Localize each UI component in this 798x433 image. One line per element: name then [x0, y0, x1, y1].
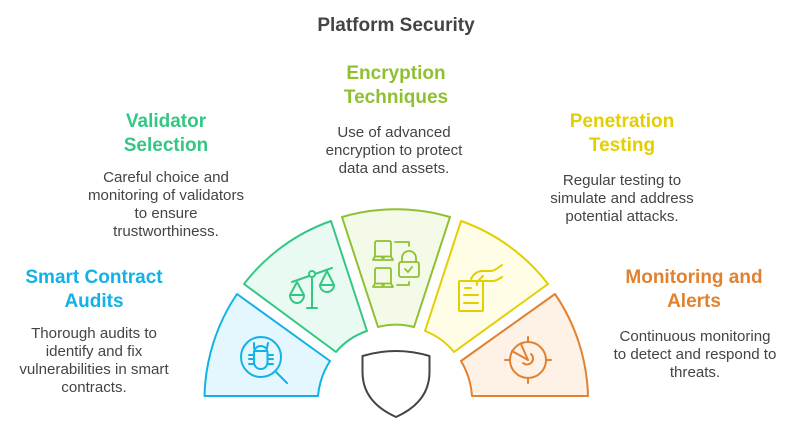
text: Validator Selection — [88, 169, 244, 240]
heading: Encryption Techniques: Techniques — [344, 87, 448, 108]
text: Penetration Testing — [550, 172, 694, 225]
heading: Penetration Testing: Penetration — [570, 111, 674, 132]
icon: bug under magnifier — [241, 337, 287, 383]
heading: Encryption Techniques — [344, 63, 448, 108]
segment: lime — [342, 209, 450, 327]
heading: Validator Selection: Validator — [126, 111, 206, 132]
text: Encryption Techniques: Use of advanced — [337, 124, 451, 141]
text: Validator Selection: to ensure — [135, 205, 197, 222]
text: Smart Contract Audits: contracts. — [61, 379, 127, 396]
text: Validator Selection: Careful choice and — [103, 169, 229, 186]
icon: hand holding document — [459, 265, 502, 311]
heading: Encryption Techniques: Encryption — [346, 63, 446, 84]
text: Encryption Techniques: encryption to protect — [326, 142, 462, 159]
icon: balance scales — [290, 268, 334, 308]
icon: radar gauge — [505, 337, 551, 383]
text: Monitoring and Alerts: Continuous monitoring — [619, 328, 771, 345]
heading: Monitoring and Alerts: Monitoring and — [625, 267, 763, 288]
segment: orange — [461, 294, 588, 396]
title: Platform Security — [317, 15, 475, 36]
text: Penetration Testing: simulate and address — [550, 190, 694, 207]
text: Validator Selection: trustworthiness. — [113, 223, 219, 240]
heading: Penetration Testing: Testing — [589, 135, 655, 156]
heading: Smart Contract Audits — [25, 267, 163, 312]
text: Monitoring and Alerts: threats. — [670, 364, 720, 381]
segment: yellow — [425, 221, 548, 352]
heading: Penetration Testing — [570, 111, 674, 156]
text: Penetration Testing: potential attacks. — [565, 208, 679, 225]
text: Smart Contract Audits — [19, 325, 169, 396]
segment: blue — [204, 294, 330, 396]
heading: Monitoring and Alerts: Alerts — [667, 291, 721, 312]
icon: laptops and padlock — [373, 241, 419, 287]
heading: Monitoring and Alerts — [625, 267, 763, 312]
heading: Validator Selection — [124, 111, 208, 156]
text: Smart Contract Audits: Thorough audits to — [31, 325, 157, 342]
heading: Smart Contract Audits: Smart Contract — [25, 267, 163, 288]
heading: Validator Selection: Selection — [124, 135, 208, 156]
segment: green — [244, 221, 367, 352]
text: Monitoring and Alerts — [614, 328, 776, 381]
text: Smart Contract Audits: vulnerabilities in smart — [19, 361, 169, 378]
heading: Smart Contract Audits: Audits — [64, 291, 124, 312]
text: Penetration Testing: Regular testing to — [563, 172, 681, 189]
text: Smart Contract Audits: identify and fix — [46, 343, 142, 360]
text: Monitoring and Alerts: to detect and respond to — [614, 346, 776, 363]
text: Encryption Techniques — [326, 124, 462, 177]
text: Encryption Techniques: data and assets. — [339, 160, 449, 177]
icon: central shield — [362, 351, 430, 417]
text: Validator Selection: monitoring of validators — [88, 187, 244, 204]
